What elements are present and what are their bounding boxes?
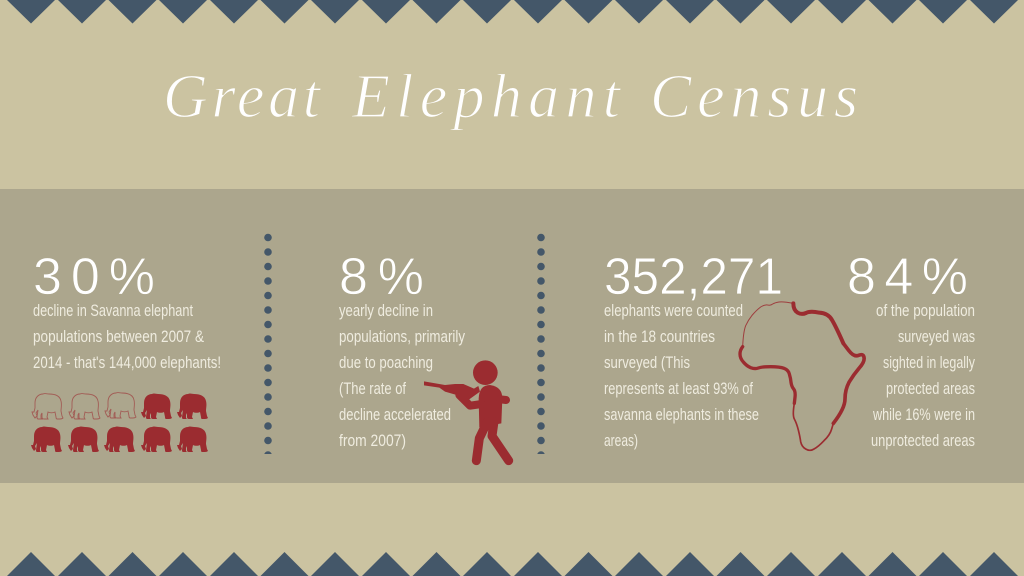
- text: yearly decline: yearly decline in: [339, 301, 433, 320]
- bottom zigzag border: [7, 552, 1018, 576]
- text: yearly decline: [339, 301, 465, 450]
- text: yearly decline: from 2007): [339, 431, 406, 450]
- icon: Africa outline: [740, 302, 864, 450]
- icon: poacher with rifle: [424, 360, 509, 461]
- text: protected areas: sighted in legally: [883, 353, 975, 372]
- stat: 8%: 8%: [339, 248, 424, 306]
- title: Census: [650, 63, 858, 131]
- icon row: ten elephants, three outlined: [31, 393, 208, 452]
- text: elephants counted: [604, 301, 759, 450]
- text: elephants counted: represents at least 93% of: [604, 379, 753, 398]
- divider: dotted line left: [264, 234, 272, 459]
- text: savanna decline: decline in Savanna elephant: [33, 301, 193, 320]
- text: protected areas: protected areas: [886, 379, 975, 398]
- text: elephants counted: surveyed (This: [604, 353, 690, 372]
- text: yearly decline: (The rate of: [339, 379, 406, 398]
- top zigzag border: [7, 0, 1018, 24]
- text: yearly decline: populations, primarily: [339, 327, 465, 346]
- text: elephants counted: savanna elephants in these: [604, 405, 759, 424]
- text: yearly decline: due to poaching: [339, 353, 433, 372]
- text: elephants counted: elephants were counted: [604, 301, 743, 320]
- text: savanna decline: 2014 - that's 144,000 elephants!: [33, 353, 221, 372]
- stat: 84%: 84%: [847, 248, 968, 306]
- text: savanna decline: populations between 2007 &: [33, 327, 205, 346]
- title: [163, 63, 858, 131]
- text: elephants counted: in the 18 countries: [604, 327, 715, 346]
- icon: outlined elephants: [32, 393, 136, 419]
- title: Great: [163, 63, 322, 131]
- text: protected areas: surveyed was: [898, 327, 975, 346]
- stat: 352,271: 352,271: [604, 248, 783, 306]
- panel: statistics band: [0, 189, 1024, 483]
- text: yearly decline: decline accelerated: [339, 405, 451, 424]
- icon: solid elephants: [31, 394, 208, 452]
- divider: dotted line right: [537, 234, 545, 459]
- text: elephants counted: areas): [604, 431, 638, 450]
- text: protected areas: of the population: [876, 301, 975, 320]
- text: protected areas: while 16% were in: [872, 405, 975, 424]
- text: savanna decline: [33, 301, 221, 372]
- stat: 30%: 30%: [33, 248, 155, 306]
- text: protected areas: [871, 301, 975, 450]
- title: Elephant: [351, 63, 622, 131]
- text: protected areas: unprotected areas: [871, 431, 975, 450]
